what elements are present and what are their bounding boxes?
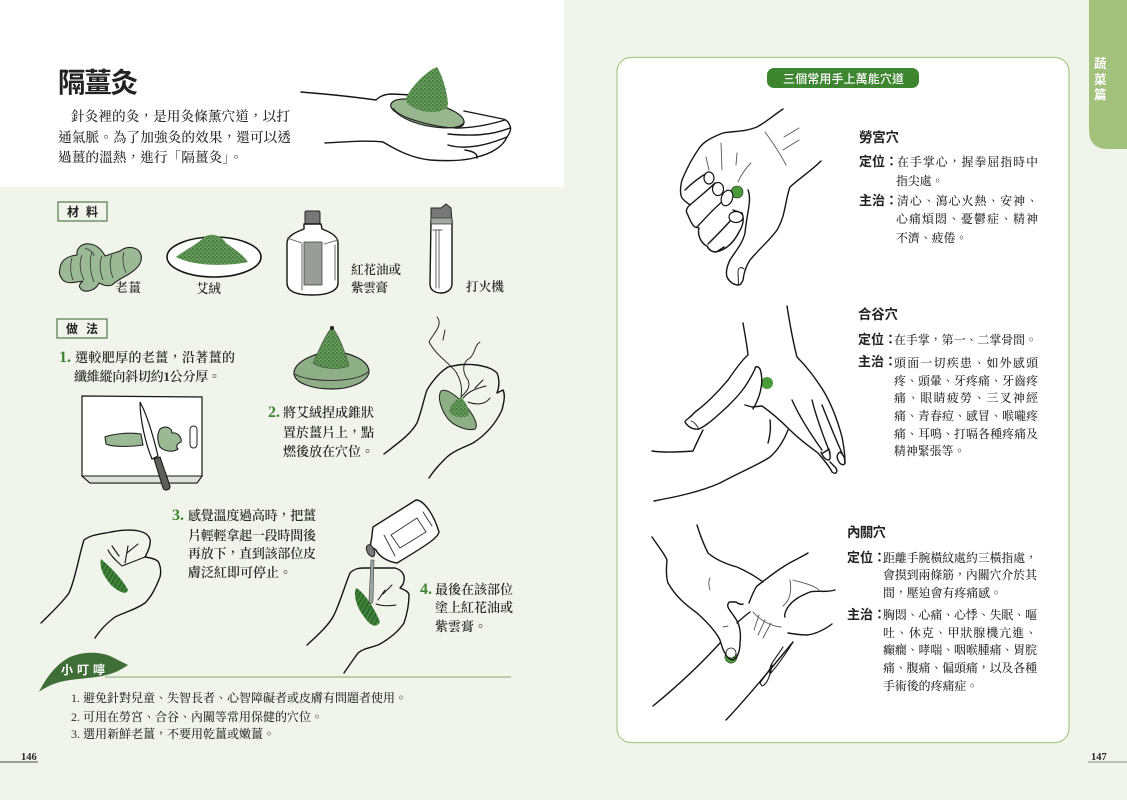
page number 147: 147	[1091, 752, 1107, 763]
step 1 text: 纖維縱向斜切約1公分厚。	[74, 369, 221, 384]
text: neiguan	[847, 524, 1038, 693]
page number 147	[1088, 752, 1127, 763]
step 1 text: 1.	[59, 349, 71, 366]
step 1 text: 選較肥厚的老薑，沿著薑的	[75, 350, 235, 365]
text: neiguan: 距離手腕橫紋處約三橫指處，	[883, 551, 1037, 565]
illustration: hegu hand	[652, 306, 845, 501]
step 2 text: 燃後放在穴位。	[283, 444, 374, 459]
step 3 text: 感覺溫度過高時，把薑	[188, 508, 316, 523]
illustration: pouring oil from bottle onto hand	[307, 500, 439, 673]
section tab	[1089, 0, 1127, 149]
text: laogong: 定位：	[859, 154, 898, 169]
panel heading pill: 三個常用手上萬能穴道	[783, 71, 904, 86]
text: neiguan: 主治：	[847, 607, 886, 622]
text: laogong: 心痛煩悶、憂鬱症、精神	[896, 212, 1038, 226]
icon: bottle of oil	[287, 211, 401, 295]
step 3 text: 膚泛紅即可停止。	[188, 565, 292, 580]
panel heading pill	[767, 68, 919, 88]
icon: lighter	[430, 204, 504, 294]
illustration: cutting ginger on board	[82, 396, 202, 490]
text: hegu: 在手掌，第一、二掌骨間。	[894, 333, 1037, 347]
label: materials: 材料	[67, 204, 98, 219]
text: neiguan: 定位：	[847, 550, 886, 565]
tips list: 1. 避免針對兒童、失智長者、心智障礙者或皮膚有問題者使用。	[71, 690, 407, 705]
step 3 text	[172, 507, 317, 580]
text: neiguan: 間，壓迫會有疼痛感。	[883, 586, 1002, 600]
text: hegu: 合谷穴	[858, 306, 898, 322]
text: hegu: 精神緊張等。	[894, 444, 965, 458]
icon: hand holding ginger moxa	[301, 67, 511, 161]
step 4 text: 塗上紅花油或	[435, 600, 513, 615]
text: neiguan: 吐、休克、甲狀腺機亢進、	[883, 626, 1037, 640]
step 2 text: 2.	[268, 404, 280, 421]
text: hegu: 痛、青春痘、感冒、喉嚨疼	[894, 409, 1038, 423]
text: hegu: 定位：	[858, 332, 897, 347]
illustration: hand with burning moxa	[384, 317, 504, 478]
illustration: laogong hand	[680, 109, 821, 285]
tips list: 3. 選用新鮮老薑，不要用乾薑或嫩薑。	[71, 726, 275, 741]
text: laogong: 勞宮穴	[859, 129, 900, 145]
text: hegu: 頭面一切疾患、如外感頭	[894, 356, 1039, 370]
text: hegu: 痛、耳鳴、打嗝各種疼痛及	[894, 427, 1038, 441]
label: materials	[58, 202, 107, 221]
text: neiguan: 癲癇、哮喘、咽喉腫痛、胃脘	[883, 643, 1037, 657]
text: neiguan: 痛、腹痛、偏頭痛，以及各種	[883, 661, 1037, 675]
step 4 text	[420, 581, 513, 634]
icon: old ginger: 老薑	[115, 280, 141, 295]
illustration: moxa cone on ginger slice	[294, 326, 369, 389]
icon: bottle of oil: 紫雲膏	[351, 280, 388, 295]
illustration: hand with ginger red mark	[41, 530, 161, 638]
label: method	[57, 319, 107, 338]
step 4 text: 最後在該部位	[435, 582, 513, 597]
section tab: 蔬	[1094, 56, 1107, 71]
text: neiguan: 會摸到兩條筋，內關穴介於其	[883, 568, 1038, 582]
text: laogong: 清心、瀉心火熱、安神、	[897, 194, 1038, 208]
icon: old ginger	[59, 244, 141, 295]
text: neiguan: 內關穴	[847, 524, 886, 540]
tips divider	[105, 676, 511, 678]
text: hegu: 痛、眼睛疲勞、三叉神經	[894, 391, 1038, 405]
intro text	[58, 108, 291, 165]
page number 146: 146	[21, 752, 37, 763]
panel: acupoints	[617, 58, 1069, 742]
step 4 text: 紫雲膏。	[435, 619, 487, 634]
text: neiguan: 胸悶、心痛、心悸、失眠、嘔	[883, 608, 1037, 622]
page number 146	[0, 752, 38, 763]
text: laogong: 不濟、疲倦。	[896, 231, 967, 245]
icon: mugwort floss on plate: 艾絨	[196, 281, 221, 296]
intro text: 通氣脈。為了加強灸的效果，還可以透	[58, 129, 291, 145]
tips list	[71, 690, 407, 741]
text: laogong: 主治：	[859, 193, 898, 208]
text: hegu	[858, 306, 1039, 458]
text: laogong	[859, 129, 1038, 245]
icon: lighter: 打火機	[466, 279, 504, 294]
text: hegu: 主治：	[858, 354, 897, 369]
icon: leaf tips badge: 小叮嚀	[61, 662, 105, 677]
text: laogong: 指尖處。	[896, 174, 944, 188]
step 2 text: 將艾絨捏成錐狀	[283, 405, 374, 420]
white header area	[0, 0, 564, 187]
step 3 text: 片輕輕拿起一段時間後	[188, 528, 317, 543]
text: laogong: 在手掌心，握拳屈指時中	[897, 155, 1038, 169]
step 4 text: 4.	[420, 581, 432, 598]
icon: mugwort floss on plate	[167, 235, 261, 296]
illustration: neiguan hand	[652, 525, 835, 720]
step 3 text: 3.	[172, 507, 184, 524]
text: hegu: 疼、頭暈、牙疼痛、牙齒疼	[894, 374, 1038, 388]
title: 隔薑灸	[58, 67, 138, 98]
tips list: 2. 可用在勞宮、合谷、內關等常用保健的穴位。	[71, 709, 323, 724]
section tab: 菜	[1094, 72, 1107, 87]
step 2 text: 置於薑片上，點	[283, 425, 374, 440]
text: neiguan: 手術後的疼痛症。	[883, 679, 978, 693]
step 1 text	[59, 349, 235, 384]
step 3 text: 再放下，直到該部位皮	[188, 546, 316, 561]
icon: bottle of oil: 紅花油或	[351, 262, 401, 277]
step 2 text	[268, 404, 374, 459]
intro text: 過薑的溫熱，進行「隔薑灸」。	[58, 149, 243, 165]
label: method: 做法	[66, 321, 98, 336]
section tab: 篇	[1094, 87, 1107, 102]
icon: leaf tips badge	[39, 653, 128, 692]
intro text: 針灸裡的灸，是用灸條薰穴道，以打	[71, 108, 290, 124]
